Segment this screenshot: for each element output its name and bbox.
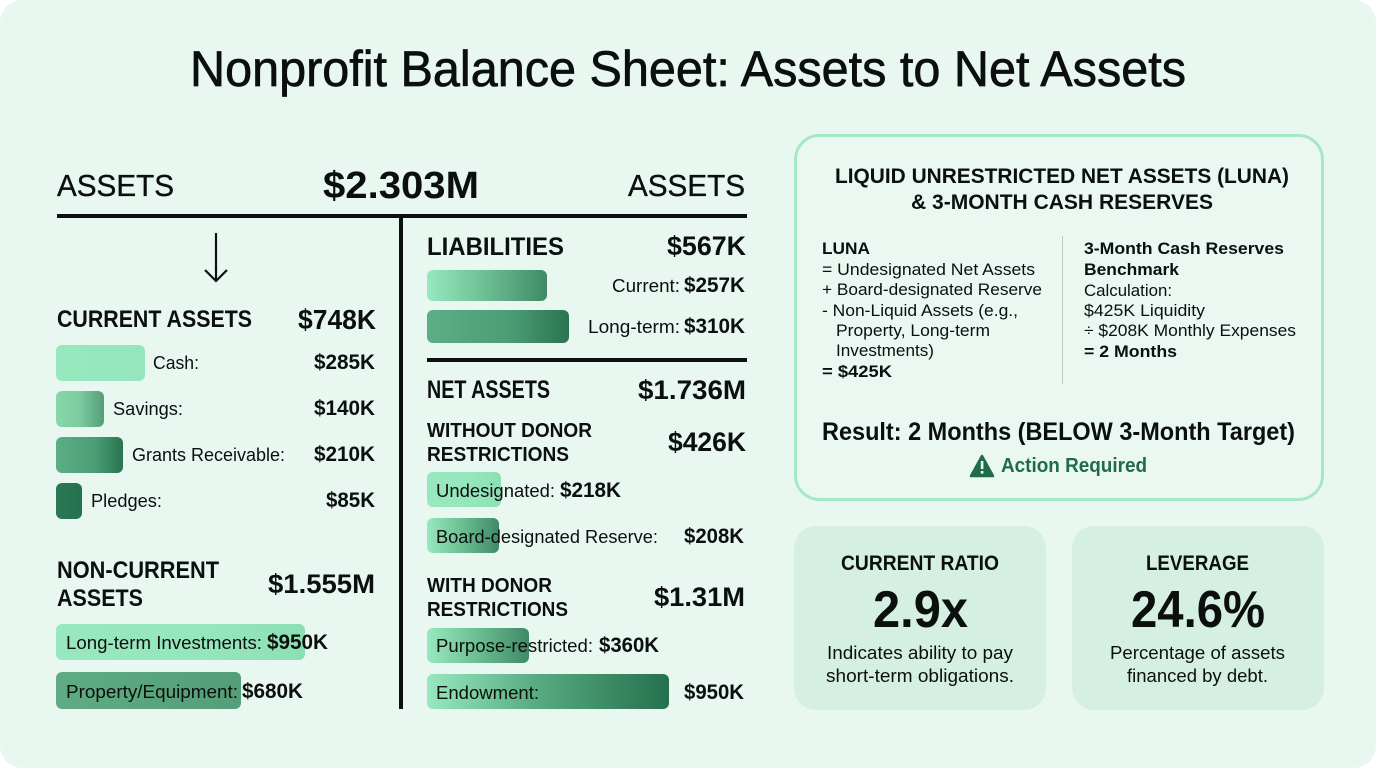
section: non-current assets [56, 557, 375, 709]
heading: non-current assets: NON-CURRENT [57, 557, 219, 584]
row: long-term liabilities: Long-term: [588, 317, 680, 337]
row: savings: $140K [314, 397, 375, 420]
heading: liabilities: $567K [667, 231, 746, 261]
row: long-term investments [56, 624, 328, 660]
section: net assets [427, 375, 746, 709]
row: long-term liabilities [427, 310, 745, 343]
row: current liabilities: $257K [684, 274, 745, 297]
row: long-term investments: $950K [267, 631, 328, 654]
heading: current assets [57, 304, 376, 335]
row: cash: Cash: [153, 353, 199, 373]
heading: net assets: NET ASSETS [427, 376, 550, 404]
panel: LUNA and cash reserves [796, 136, 1322, 500]
card: current ratio: 2.9x [873, 581, 968, 639]
column divider [1062, 236, 1063, 384]
heading: non-current assets: $1.555M [268, 569, 375, 599]
heading: liabilities [427, 231, 746, 261]
card: current ratio: short-term obligations. [826, 666, 1014, 686]
card: leverage [1072, 526, 1324, 710]
row: property and equipment: $680K [242, 680, 303, 703]
card: leverage: 24.6% [1131, 581, 1265, 639]
section: liabilities [427, 231, 746, 343]
row: endowment: Endowment: [436, 683, 539, 703]
row: long-term liabilities: $310K [684, 315, 745, 338]
action required label: Action Required [1001, 455, 1147, 477]
row: board-designated reserve: Board-designated Reserve: [436, 527, 658, 547]
row: purpose-restricted: Purpose-restricted: [436, 636, 593, 656]
row: pledges [56, 483, 375, 519]
row: long-term investments: Long-term Investments: [66, 633, 262, 653]
text block: LUNA formula: = Undesignated Net Assets [822, 260, 1035, 279]
subheading: without donor restrictions: $426K [668, 427, 746, 457]
horizontal rule under header [57, 214, 747, 218]
header: assets total: ASSETS [628, 168, 745, 203]
row: current liabilities: Current: [612, 276, 680, 296]
subheading: without donor restrictions [427, 420, 746, 466]
panel heading: LIQUID UNRESTRICTED NET ASSETS (LUNA) [835, 165, 1289, 188]
card: leverage: LEVERAGE [1146, 552, 1249, 575]
row: undesignated [427, 472, 621, 507]
text block: 3-month benchmark: $425K Liquidity [1084, 301, 1206, 320]
section: current assets [56, 304, 376, 519]
text block: 3-month benchmark [1084, 239, 1296, 361]
row: pledges: $85K [326, 489, 375, 512]
header: assets total [57, 165, 745, 207]
row: cash: $285K [314, 351, 375, 374]
row: property and equipment: Property/Equipment: [66, 682, 238, 702]
card: current ratio: Indicates ability to pay [827, 643, 1013, 663]
text block: LUNA formula [822, 239, 1042, 381]
subheading: with donor restrictions: WITH DONOR [427, 575, 553, 597]
subheading: with donor restrictions [427, 575, 745, 621]
card: current ratio [794, 526, 1046, 710]
text block: 3-month benchmark: 3-Month Cash Reserves [1084, 239, 1284, 258]
row: grants receivable: $210K [314, 443, 375, 466]
text block: LUNA formula: Property, Long-term [836, 321, 990, 340]
row: purpose-restricted: $360K [599, 634, 659, 657]
heading: current assets: CURRENT ASSETS [57, 306, 252, 333]
row: board-designated reserve: $208K [684, 525, 744, 548]
heading: liabilities: LIABILITIES [427, 233, 564, 261]
panel: balance sheet [56, 165, 747, 709]
heading: net assets: $1.736M [638, 375, 746, 405]
title: Nonprofit Balance Sheet: Assets to Net Assets [190, 41, 1186, 97]
card: leverage: financed by debt. [1127, 666, 1268, 686]
divider between liabilities and net assets [427, 358, 747, 362]
row: savings: Savings: [113, 399, 183, 419]
heading: non-current assets [57, 557, 375, 612]
text block: LUNA formula: LUNA [822, 239, 870, 258]
icon: warning triangle [971, 456, 993, 476]
header: assets total: $2.303M [323, 165, 479, 207]
panel heading: & 3-MONTH CASH RESERVES [911, 191, 1213, 214]
row: property and equipment [56, 672, 303, 709]
row: undesignated: Undesignated: [436, 481, 555, 501]
row: undesignated: $218K [560, 479, 621, 502]
heading: current assets: $748K [298, 304, 376, 335]
subheading: with donor restrictions: $1.31M [654, 582, 745, 612]
row: endowment: $950K [684, 681, 744, 704]
panel heading [835, 165, 1289, 214]
row: endowment [427, 674, 744, 709]
card: leverage: Percentage of assets [1110, 643, 1285, 663]
result statement: Result: 2 Months (BELOW 3-Month Target) [822, 418, 1295, 446]
heading: non-current assets: ASSETS [57, 585, 143, 612]
text block: LUNA formula: = $425K [822, 362, 893, 381]
text block: 3-month benchmark: Calculation: [1084, 281, 1172, 300]
central vertical divider [399, 218, 403, 709]
subheading: with donor restrictions: RESTRICTIONS [427, 599, 568, 621]
row: grants receivable: Grants Receivable: [132, 445, 285, 465]
heading: net assets [427, 375, 746, 405]
text block: 3-month benchmark: ÷ $208K Monthly Expenses [1084, 321, 1296, 340]
row: cash [56, 345, 375, 381]
text block: 3-month benchmark: = 2 Months [1084, 342, 1177, 361]
row: board-designated reserve [427, 518, 744, 553]
header: assets total: ASSETS [57, 168, 174, 203]
text block: LUNA formula: - Non-Liquid Assets (e.g., [822, 301, 1018, 320]
row: pledges: Pledges: [91, 491, 162, 511]
arrow: down [205, 233, 227, 281]
subheading: without donor restrictions: RESTRICTIONS [427, 444, 569, 466]
card: current ratio: CURRENT RATIO [841, 552, 999, 575]
row: savings [56, 391, 375, 427]
text block: LUNA formula: + Board-designated Reserve [822, 280, 1042, 299]
subheading: without donor restrictions: WITHOUT DONOR [427, 420, 593, 442]
text block: 3-month benchmark: Benchmark [1084, 260, 1180, 279]
row: grants receivable [56, 437, 375, 473]
row: current liabilities [427, 270, 745, 301]
text block: LUNA formula: Investments) [836, 341, 934, 360]
row: purpose-restricted [427, 628, 659, 663]
